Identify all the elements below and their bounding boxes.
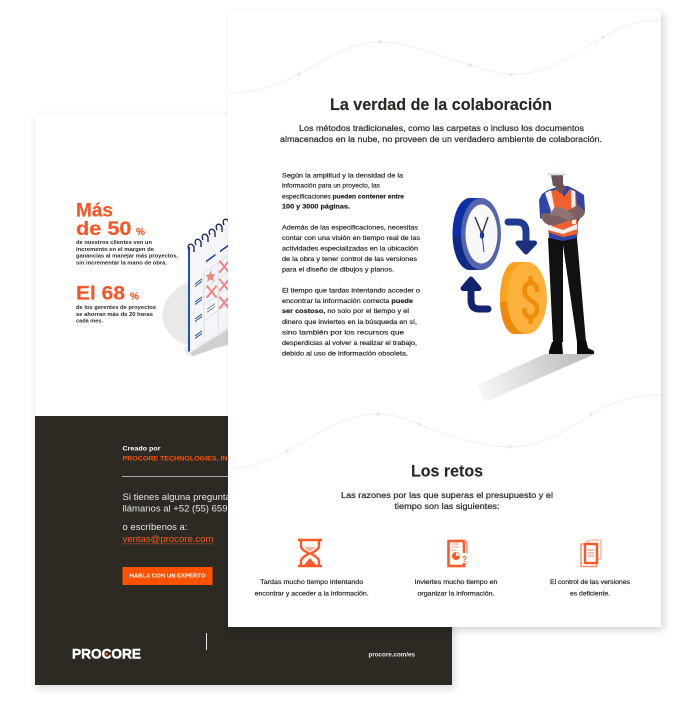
- subheading: [341, 490, 553, 511]
- logo: procore: PROCORE: [72, 646, 141, 662]
- statistic: más de 50 %: incremento en el margen de: [76, 247, 154, 253]
- icon: hourglass: [298, 540, 322, 566]
- contact text: [122, 492, 234, 545]
- icon: clock: [452, 198, 501, 270]
- icon: calendar illustration: [157, 210, 267, 357]
- body text: 100 y 3000 páginas.: [282, 204, 350, 211]
- body text: contar con una visión en tiempo real de las: [282, 235, 421, 242]
- subtitle: almacenados en la nube, no proveen de un verdadero ambiente de colaboración.: [280, 134, 602, 144]
- statistic: el 68 %: se ahorran más de 20 horas: [76, 312, 153, 318]
- body text: [282, 172, 421, 358]
- worker figure: [539, 167, 594, 354]
- subtitle: Los métodos tradicionales, como las carpetas o incluso los documentos: [299, 123, 584, 133]
- challenge: versions: es deficiente.: [570, 591, 610, 598]
- challenge: organizing: organizar la información.: [418, 591, 495, 598]
- statistic: el 68 %: cada mes.: [76, 319, 103, 325]
- button: habla con un experto: [122, 567, 212, 585]
- contact text: llámanos al +52 (55) 659: [122, 504, 228, 515]
- contact text: ventas@procore.com: [122, 534, 214, 545]
- statistic: más de 50 %: ganancias al manejar más proyectos,: [76, 254, 178, 260]
- icon: stacked documents: [581, 540, 601, 566]
- body text: sino también por los recursos que: [282, 329, 404, 336]
- statistic: más de 50 %: Más: [76, 201, 113, 222]
- contact text: Si tienes alguna pregunta,: [122, 492, 234, 503]
- body text: encontrar la información correcta puede: [282, 298, 413, 305]
- panel: back page: [35, 115, 455, 689]
- statistic: el 68 %: [76, 284, 156, 325]
- challenge: versions: [550, 540, 630, 598]
- body text: dinero que inviertes en la búsqueda en sí,: [282, 319, 417, 326]
- body text: Según la amplitud y la densidad de la: [282, 172, 403, 180]
- statistic: el 68 %: El 68: [76, 284, 125, 304]
- credits: creado por: Creado por: [122, 446, 161, 453]
- challenge: time: [255, 540, 369, 598]
- illustration: worker, clock and coin: [452, 167, 595, 402]
- credits: creado por: [122, 446, 235, 477]
- challenge: organizing: [414, 541, 498, 598]
- title: la verdad de la colaboración: La verdad de la colaboración: [330, 96, 552, 114]
- statistic: el 68 %: %: [130, 292, 139, 302]
- statistic: más de 50 %: %: [136, 227, 145, 238]
- subheading: Las razones por las que superas el presupuesto y el: [341, 490, 553, 500]
- footer link: procore.com/es: [368, 652, 415, 659]
- heading: los retos: Los retos: [411, 463, 483, 481]
- statistic: el 68 %: de los gerentes de proyectos: [76, 305, 156, 311]
- body text: para el diseño de dibujos y planos.: [282, 266, 394, 274]
- body text: ser costoso, no solo por el tiempo y el: [282, 308, 410, 315]
- credits: creado por: PROCORE TECHNOLOGIES, INC.: [122, 456, 235, 462]
- statistic: más de 50 %: sin incrementar la mano de obra.: [76, 260, 167, 266]
- floor shadow: [477, 354, 595, 402]
- body text: desperdicias al volver a realizar el trabajo,: [282, 340, 417, 347]
- body text: debido al uso de información obsoleta.: [282, 350, 408, 358]
- contact text: o escríbenos a:: [122, 522, 188, 533]
- button: habla con un experto: HABLA CON UN EXPERTO: [130, 574, 206, 580]
- arrow: coin to clock: [463, 279, 488, 309]
- body text: actividades especializadas en la ubicación: [282, 246, 418, 252]
- challenge: time: encontrar y acceder a la información.: [255, 591, 369, 598]
- statistic: más de 50 %: de nuestros clientes ven un: [76, 240, 153, 246]
- body text: información para un proyecto, las: [282, 183, 381, 190]
- body text: Además de las especificaciones, necesitas: [282, 224, 419, 232]
- body text: El tiempo que tardas intentando acceder o: [282, 288, 420, 294]
- arrow: clock to coin: [508, 222, 534, 252]
- icon: coin: [500, 262, 547, 334]
- challenge: time: Tardas mucho tiempo intentando: [260, 579, 364, 586]
- challenge: organizing: Inviertes mucho tiempo en: [414, 579, 498, 586]
- statistic: más de 50 %: [76, 201, 178, 266]
- body text: especificaciones pueden contener entre: [282, 193, 404, 200]
- subtitle: [280, 123, 602, 144]
- icon: document with question mark: ?: [462, 555, 467, 564]
- body text: de la obra y tener control de las versiones: [282, 256, 418, 263]
- subheading: tiempo son las siguientes:: [394, 501, 500, 511]
- panel: front page: [228, 11, 664, 630]
- statistic: más de 50 %: de 50: [76, 219, 132, 240]
- challenge: versions: El control de las versiones: [550, 579, 630, 586]
